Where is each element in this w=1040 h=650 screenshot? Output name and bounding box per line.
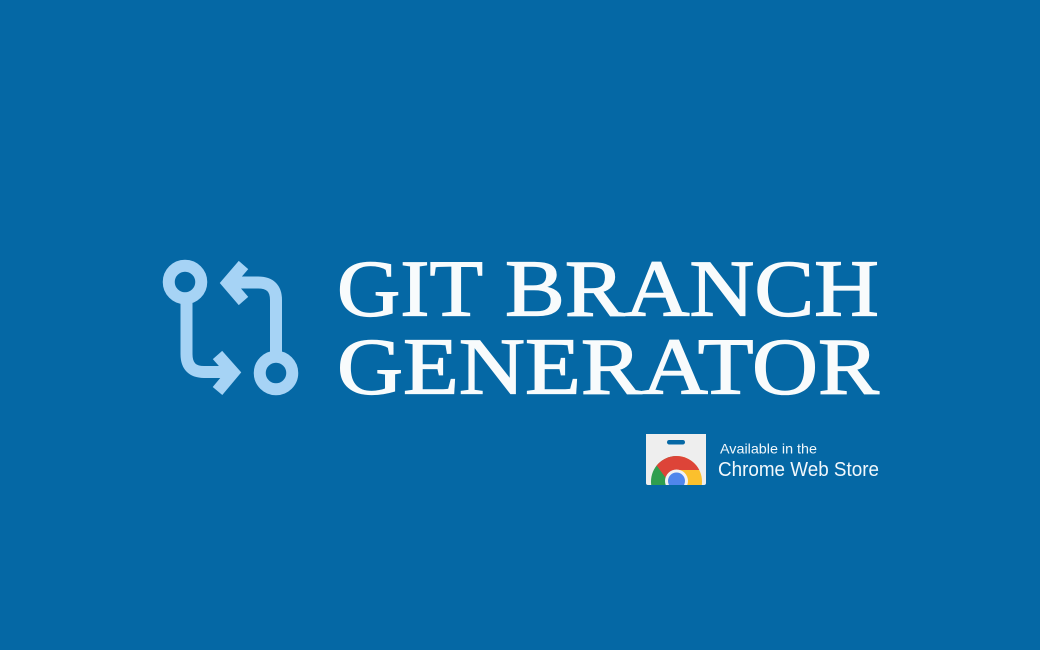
icon: Chrome Web Store bag	[646, 434, 706, 485]
title: GIT	[337, 246, 483, 334]
badge text: Available in the: Available in the	[720, 440, 817, 456]
title: GENERATOR	[337, 324, 880, 412]
badge: Chrome Web Store	[646, 434, 878, 485]
title: BRANCH	[505, 246, 879, 334]
badge text: Chrome Web Store: Chrome Web Store	[718, 458, 879, 481]
title	[337, 246, 880, 412]
icon: git branch arrows	[169, 265, 292, 391]
